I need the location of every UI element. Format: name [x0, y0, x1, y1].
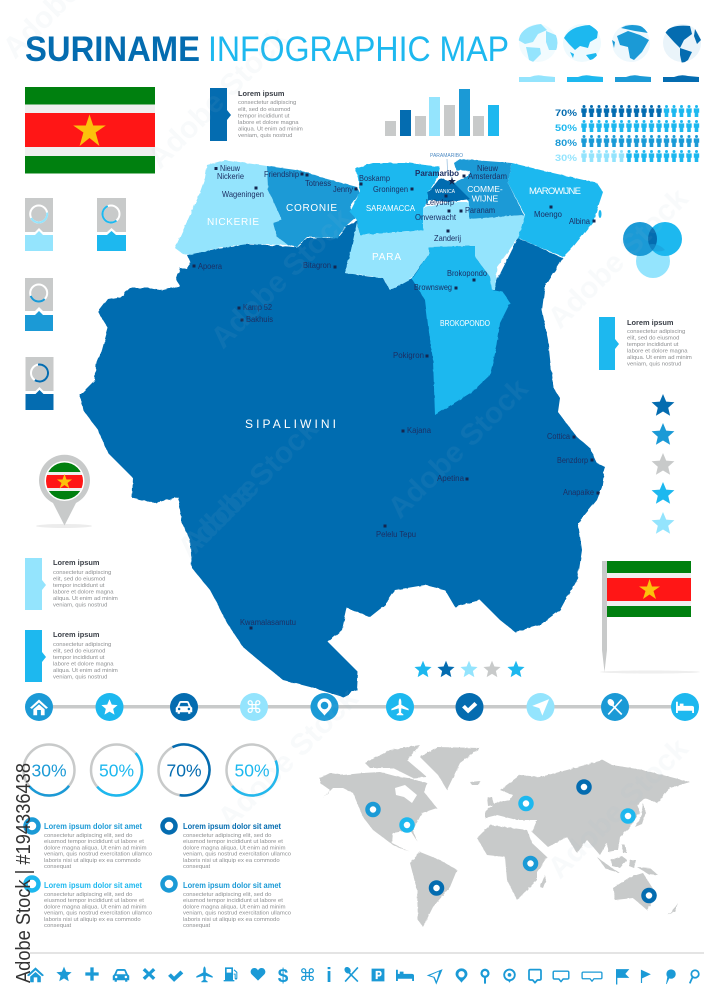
panel: right text block: Lorem ipsum: [627, 318, 674, 327]
text block: bottom right 1: consequat: [183, 864, 211, 870]
panel: right text block: labore et dolore magna: [627, 348, 688, 354]
flag: Suriname large: [25, 87, 155, 174]
icon: command circle: ⌘: [246, 698, 262, 718]
icon: vertical stars: [652, 394, 674, 534]
panel: left text block bright: aliqua. Ut enim ad minim: [53, 668, 118, 674]
watermark: faint stock marks: Adobe: [177, 471, 266, 560]
chart: percentage donuts: [13, 734, 285, 806]
region name labels: [207, 153, 581, 431]
donut 50% second: [219, 737, 285, 803]
panel: top text block: tempor incididunt ut: [238, 114, 290, 120]
watermark: faint stock marks: Adobe Stock: [212, 682, 365, 835]
region: Marowijne: [508, 163, 603, 257]
panel: left text block bright: tempor incididunt ut: [53, 655, 105, 661]
town labels: Albina: [569, 216, 590, 226]
text block: bottom left 2: Lorem ipsum dolor sit amet: [44, 881, 142, 890]
region name labels: SIPALIWINI: [245, 417, 336, 431]
bars under globes: [519, 75, 699, 82]
town labels: Bitagron: [303, 260, 331, 270]
town labels: Benzdorp: [557, 455, 588, 465]
region name labels: PARAMARIBO: [430, 153, 464, 159]
icon: command circle: [240, 693, 268, 721]
text block: bottom right 2: dolore magna aliqua. Ut enim ad minim: [183, 904, 286, 910]
chart: people percentages: 70%: [555, 108, 578, 119]
panel: left text block light: [25, 558, 118, 610]
town labels: Paramaribo: [415, 168, 459, 178]
icons: bottom row: $: [278, 966, 289, 987]
icons: bottom row: [27, 965, 699, 987]
region name labels: NICKERIE: [207, 217, 259, 228]
panel: right text block: consectetur adipiscing: [627, 329, 685, 335]
icon: plane circle: [386, 693, 414, 721]
icon: globe mid: [612, 24, 650, 62]
donut 70%: [150, 736, 218, 804]
text block: bottom left 1: dolore magna aliqua. Ut enim ad minim: [44, 845, 147, 851]
icon: flag map pin: [36, 455, 92, 528]
text block: bottom left 1: [26, 820, 153, 870]
donut 50% second: 50%: [234, 760, 270, 780]
panel: left text block light: consectetur adipiscing: [53, 570, 111, 576]
region: Para: [345, 202, 525, 290]
text block: bottom left 1: Lorem ipsum dolor sit amet: [44, 822, 142, 831]
timeline: icon circles: [25, 693, 699, 721]
watermark: faint stock marks: Adobe Stock: [142, 22, 295, 175]
panel: top text block: veniam, quis nostrud: [238, 133, 292, 139]
panel: right text block: [599, 317, 692, 370]
watermark: faint stock marks: Adobe Stock: [172, 412, 325, 565]
town labels: Bakhuis: [246, 314, 273, 324]
panel: left text block bright: elit, sed do eiusmod: [53, 648, 105, 654]
icon: globe dark: [663, 24, 701, 64]
town labels: Jenny: [333, 184, 354, 194]
text block: bottom right 2: eiusmod tempor incididunt ut labore et: [183, 898, 283, 904]
panel: left text block light: tempor incididunt ut: [53, 583, 105, 589]
icon: navigation circle: [526, 693, 554, 721]
panel: left cards: [25, 198, 126, 410]
icon: globes row: [518, 24, 701, 82]
panel: right text block: veniam, quis nostrud: [627, 362, 681, 368]
town labels: [198, 163, 594, 627]
town labels: Nickerie: [217, 171, 244, 181]
town labels: Kajana: [407, 425, 431, 435]
icon: cutlery circle: [601, 693, 629, 721]
watermark: faint stock marks: Adobe Stock: [382, 372, 535, 525]
panel: left text block bright: labore et dolore magna: [53, 662, 114, 668]
text block: bottom right 2: Lorem ipsum dolor sit amet: [183, 881, 281, 890]
panel: left text block bright: [25, 630, 118, 682]
panel: top text block: Lorem ipsum: [238, 89, 285, 98]
chart: venn circles: [623, 222, 682, 278]
lake: Hudson Bay: [395, 785, 417, 803]
panel: top text block: elit, sed do eiusmod: [238, 107, 290, 113]
watermark: vertical stock id: Adobe Stock | #194336438: [13, 763, 35, 983]
text block: bottom right 2: consectetur adipiscing elit, sed do: [183, 892, 272, 898]
region name labels: MAROWIJNE: [529, 186, 581, 197]
icon: car circle: [170, 693, 198, 721]
donut 50%: [81, 734, 152, 806]
map: world: [320, 745, 690, 927]
card: mid: [25, 278, 53, 331]
town labels: Friendship: [264, 169, 299, 179]
title: [25, 30, 509, 69]
text block: bottom left 2: laboris nisi ut aliquip ex ea commodo: [44, 917, 141, 923]
panel: left text block bright: veniam, quis nostrud: [53, 674, 107, 680]
town labels: Pokigron: [393, 350, 424, 360]
text block: bottom left 2: veniam, quis nostrud exercitation ullamco: [44, 911, 153, 917]
watermark: faint stock marks: Adobe Stock: [542, 182, 695, 335]
card: bright: [97, 198, 126, 251]
town labels: Onverwacht: [415, 212, 457, 222]
icon: bed circle: [671, 693, 699, 721]
text block: bottom left 1: consectetur adipiscing elit, sed do: [44, 833, 133, 839]
town labels: Lelydorp: [426, 197, 454, 207]
text block: bottom left 2: eiusmod tempor incididunt ut labore et: [44, 898, 144, 904]
watermark: faint stock marks: Adobe Stock: [542, 732, 695, 885]
chart: people percentages: [555, 105, 699, 164]
town labels: Kwamalasamutu: [240, 617, 296, 627]
town labels: Totness: [305, 178, 331, 188]
text block: bottom left 2: dolore magna aliqua. Ut enim ad minim: [44, 904, 147, 910]
divider line: [30, 952, 704, 954]
icon: home circle: [25, 693, 53, 721]
panel: left text block light: aliqua. Ut enim ad minim: [53, 596, 118, 602]
town labels: Apoera: [198, 261, 222, 271]
town labels: Wageningen: [222, 189, 264, 199]
region: Coronie: [267, 166, 360, 247]
icon: small island: [598, 210, 602, 218]
text block: bottom right 2: veniam, quis nostrud exercitation ullamco: [183, 911, 292, 917]
town labels: Nieuw: [220, 163, 241, 173]
bar chart: [385, 89, 499, 136]
donut 50%: 50%: [99, 760, 134, 780]
text block: bottom left 1: veniam, quis nostrud exercitation ullamco: [44, 852, 153, 858]
panel: left text block light: elit, sed do eiusmod: [53, 576, 105, 582]
region name labels: PARA: [372, 252, 401, 263]
panel: right text block: tempor incididunt ut: [627, 342, 679, 348]
panel: top text block: [210, 88, 303, 141]
region: Saramacca: [350, 163, 440, 235]
text block: bottom right 2: laboris nisi ut aliquip ex ea commodo: [183, 917, 280, 923]
panel: top text block: consectetur adipiscing: [238, 100, 296, 106]
town labels: Groningen: [373, 184, 408, 194]
icons: bottom row: i: [326, 965, 332, 987]
text block: bottom left 1: consequat: [44, 864, 72, 870]
icon: globe bright: [563, 24, 601, 62]
icons: bottom row: ⌘: [299, 966, 316, 986]
region name labels: SARAMACCA: [366, 203, 415, 213]
town labels: Apetina: [437, 473, 464, 483]
region name labels: CORONIE: [286, 203, 337, 214]
town labels: Zanderij: [434, 233, 461, 243]
flag: on pole: [600, 561, 700, 674]
icon: horizontal stars: [414, 661, 525, 677]
chart: people percentages: 50%: [555, 123, 578, 134]
region name labels: WANICA: [435, 189, 456, 195]
text block: bottom right 1: Lorem ipsum dolor sit amet: [183, 822, 281, 831]
text block: bottom left 1: eiusmod tempor incididunt ut labore et: [44, 839, 144, 845]
region name labels: WIJNE: [472, 194, 499, 204]
panel: top text block: labore et dolore magna: [238, 120, 299, 126]
text block: bottom left 2: consectetur adipiscing elit, sed do: [44, 892, 133, 898]
text block: bottom right 1: [162, 820, 292, 870]
chart: people percentages: 30%: [555, 153, 578, 164]
region name labels: COMME-: [467, 184, 503, 194]
town labels: Nieuw: [477, 163, 499, 173]
text block: bottom left 1: laboris nisi ut aliquip ex ea commodo: [44, 858, 141, 864]
card: light: [25, 198, 53, 251]
town labels: Cottica: [547, 431, 570, 441]
watermark: faint stock marks: Adobe Stock: [205, 202, 358, 355]
map: Suriname regions: [80, 153, 605, 697]
icon: star circle: [96, 693, 124, 721]
text block: bottom right 1: consectetur adipiscing elit, sed do: [183, 833, 272, 839]
region name labels: BROKOPONDO: [440, 319, 490, 328]
panel: right text block: aliqua. Ut enim ad minim: [627, 355, 692, 361]
region: Nickerie: [175, 160, 288, 255]
town markers: [192, 167, 600, 630]
icon: pin circle: [310, 693, 338, 721]
town labels: Anapaike: [563, 487, 594, 497]
donut 70%: 70%: [166, 760, 202, 780]
region: Commewijne: [453, 159, 524, 219]
region: Sipaliwini: [80, 220, 605, 697]
region: Brokopondo: [412, 246, 510, 415]
text block: bottom left 2: [26, 878, 153, 929]
town labels: Moengo: [534, 209, 562, 219]
panel: left text block light: labore et dolore magna: [53, 590, 114, 596]
text block: bottom right 1: dolore magna aliqua. Ut enim ad minim: [183, 845, 286, 851]
town labels: Boskamp: [359, 173, 390, 183]
icon: check circle: [456, 693, 484, 721]
map pins: [368, 782, 654, 901]
panel: left text block light: Lorem ipsum: [53, 558, 100, 567]
title: INFOGRAPHIC MAP: [208, 30, 509, 69]
donut 30%: [13, 734, 85, 806]
panel: left text block light: veniam, quis nostrud: [53, 602, 107, 608]
panel: right text block: elit, sed do eiusmod: [627, 336, 679, 342]
text block: bottom right 1: laboris nisi ut aliquip ex ea commodo: [183, 858, 280, 864]
panel: left text block bright: consectetur adipiscing: [53, 642, 111, 648]
town labels: Amsterdam: [468, 171, 507, 181]
region: Wanica: [428, 178, 470, 202]
chart: people percentages: 80%: [555, 138, 578, 149]
text block: bottom right 1: eiusmod tempor incididunt ut labore et: [183, 839, 283, 845]
town labels: Brokopondo: [447, 268, 487, 278]
town labels: Kamp 52: [243, 302, 272, 312]
donut 30%: 30%: [31, 760, 67, 780]
card: dark: [26, 357, 54, 410]
text block: bottom right 1: veniam, quis nostrud exercitation ullamco: [183, 852, 292, 858]
town labels: Paranam: [465, 205, 495, 215]
panel: left text block bright: Lorem ipsum: [53, 630, 100, 639]
town labels: Brownsweg: [414, 282, 452, 292]
icon: globe light: [518, 24, 558, 62]
town labels: Pelelu Tepu: [376, 529, 416, 539]
text block: bottom right 2: consequat: [183, 923, 211, 929]
text block: bottom right 2: [162, 878, 292, 929]
panel: top text block: aliqua. Ut enim ad minim: [238, 126, 303, 132]
text block: bottom left 2: consequat: [44, 923, 72, 929]
title: SURINAME: [25, 30, 200, 69]
